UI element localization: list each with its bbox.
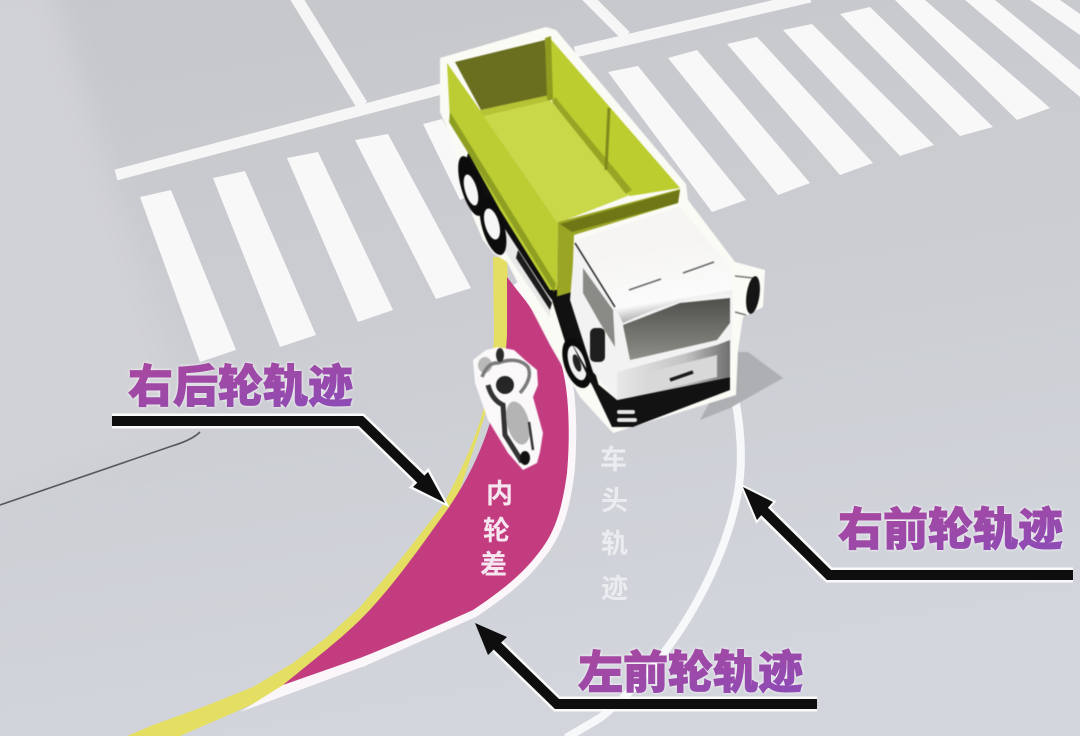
- cargo bed left wall: [447, 63, 558, 290]
- callout: left front wheel track: [475, 623, 817, 704]
- inner wheel difference zone: [283, 277, 569, 685]
- callout: right front wheel track: [743, 487, 1073, 575]
- leader arrow: [743, 487, 1073, 575]
- windshield: [623, 298, 730, 360]
- cargo bed rear wall: [455, 40, 548, 112]
- left mirror: [590, 328, 605, 362]
- label: inner wheel difference: 内: [486, 479, 513, 509]
- cargo bed head board: [557, 189, 680, 298]
- cargo bed floor: [482, 100, 630, 223]
- front left wheel: [557, 334, 597, 392]
- label: inner wheel difference: 差: [480, 550, 507, 580]
- right mirror: [735, 275, 762, 315]
- label text: 右前轮轨迹: [838, 504, 1063, 555]
- label text: 右后轮轨迹: [128, 361, 353, 412]
- dark cab mount: [552, 292, 588, 350]
- label text: 左前轮轨迹: [578, 647, 803, 698]
- rear wheels: [453, 153, 489, 219]
- left front wheel track: white: [240, 284, 569, 712]
- callout: right rear wheel track: [112, 361, 445, 503]
- right rear wheel track: yellow: [127, 257, 510, 736]
- side window: [583, 268, 615, 347]
- plate panel: [645, 355, 717, 393]
- chassis white rails: [498, 226, 550, 318]
- label: truck head track: [600, 445, 628, 604]
- right front wheel track: white: [566, 398, 741, 736]
- headlights: [617, 410, 635, 414]
- label: truck head track: 车: [600, 445, 627, 475]
- label: truck head track: 轨: [601, 529, 628, 559]
- sidewalk lighter area: [0, 0, 190, 510]
- label: inner wheel difference: [480, 479, 513, 580]
- cargo bed right wall: [549, 37, 680, 196]
- cab body: [570, 207, 733, 400]
- grille panel: [617, 340, 730, 400]
- label: truck head track: 迹: [601, 574, 628, 604]
- curb line: [0, 432, 200, 505]
- motorcycle with rider: [473, 347, 543, 470]
- truck shadow: [700, 352, 783, 420]
- crosswalk: right group: [608, 0, 1080, 212]
- black lower cab: [570, 340, 730, 427]
- truck: [440, 27, 783, 433]
- leader arrow: [112, 421, 445, 503]
- label: inner wheel difference: 轮: [483, 516, 510, 546]
- crosswalk: left group: [140, 119, 480, 362]
- truck white halo: [440, 27, 765, 433]
- leader arrow: [475, 623, 817, 704]
- label: truck head track: 头: [601, 486, 628, 516]
- cab roof: [575, 207, 733, 323]
- chassis black: [462, 153, 612, 426]
- road markings: stop lines: [116, 0, 810, 175]
